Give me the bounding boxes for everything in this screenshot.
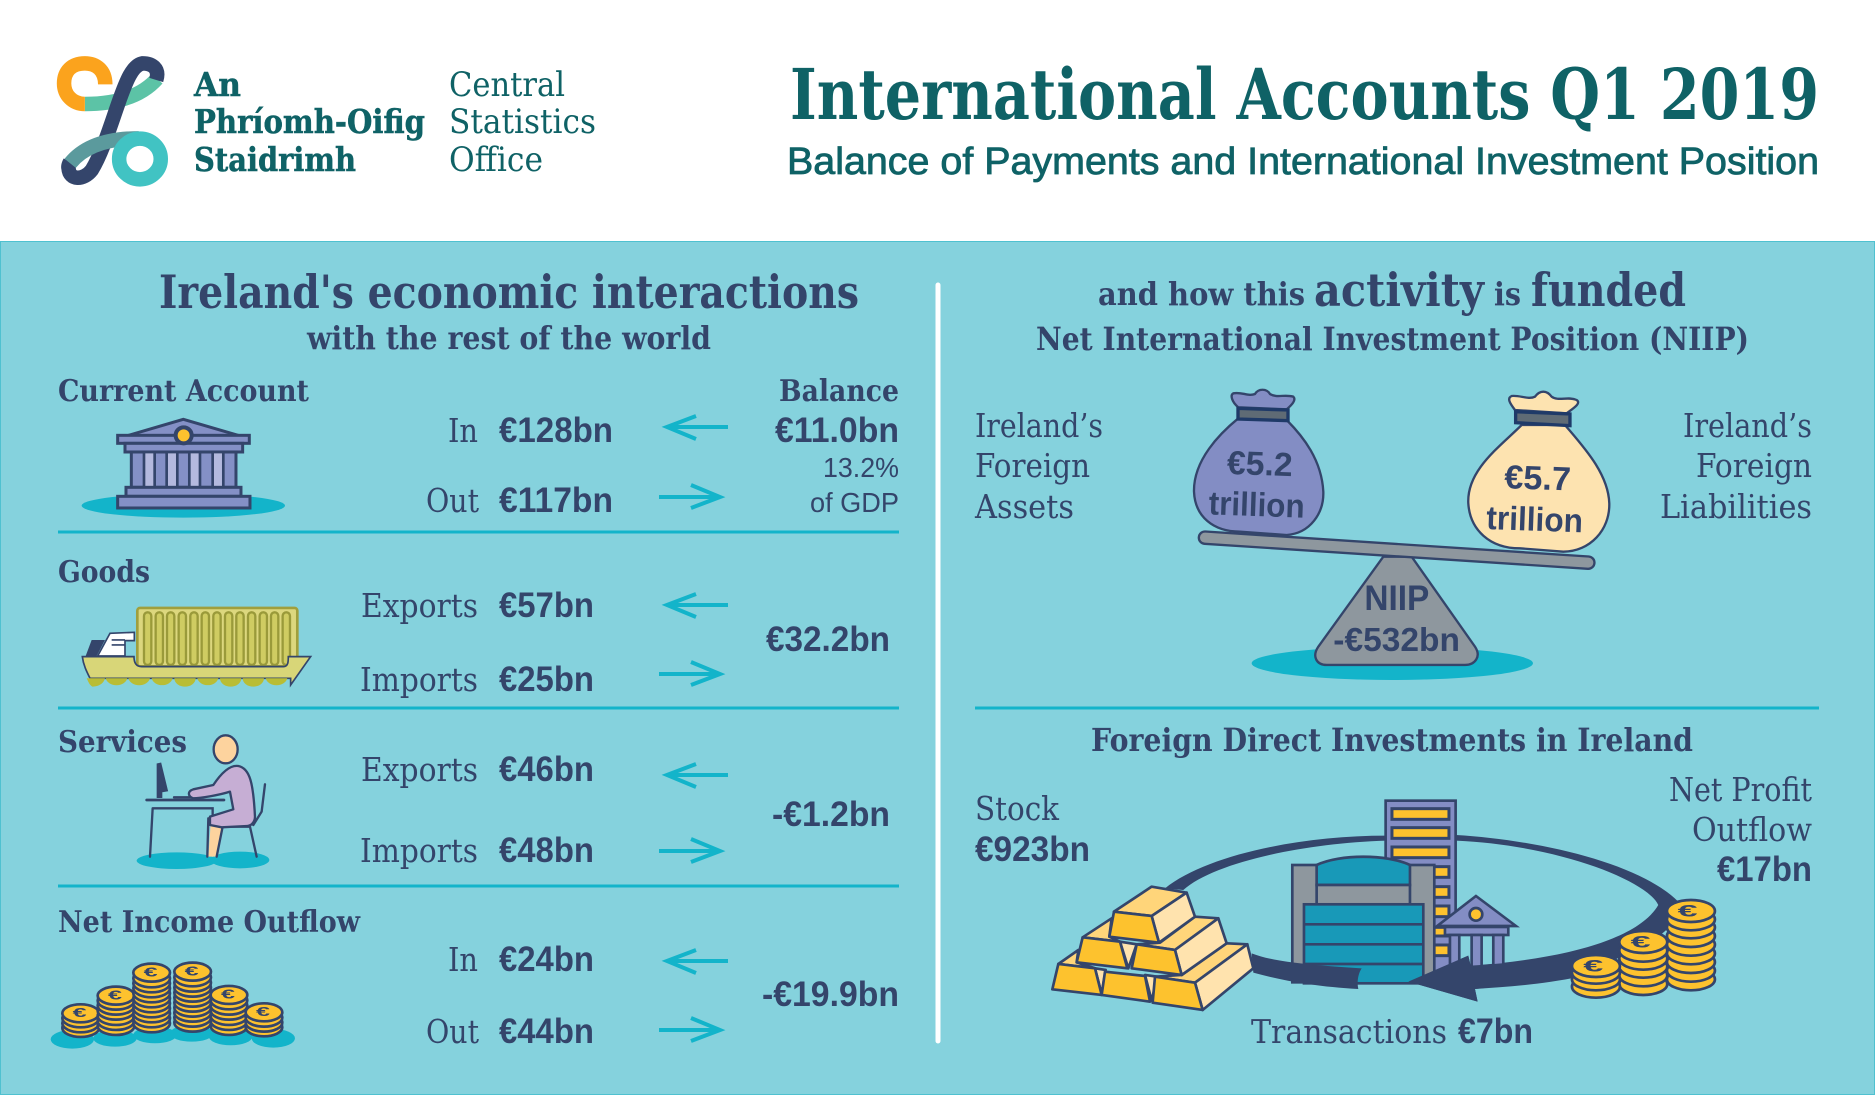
heading: Services: Services xyxy=(58,725,187,760)
left money bag: assets xyxy=(1194,390,1323,535)
icon: container ship xyxy=(82,608,311,687)
row: Imports: Imports xyxy=(360,831,478,870)
section: Current Account xyxy=(58,374,899,520)
label: Ireland's Foreign Liabilities: Ireland’s xyxy=(1683,406,1812,445)
row: In: €24bn xyxy=(499,940,594,979)
fulcrum with NIIP value xyxy=(1315,557,1478,665)
logo mark xyxy=(64,63,161,179)
label: Ireland's Foreign Liabilities: Foreign xyxy=(1696,446,1812,485)
logo text: English name: Statistics xyxy=(449,102,596,142)
coin stacks: € xyxy=(1631,933,1651,952)
icon: coin stacks: € xyxy=(221,987,236,1002)
panel: teal background xyxy=(0,242,1874,1094)
right money bag: liabilities: €5.7 xyxy=(1504,459,1572,498)
row: In: In xyxy=(448,411,478,450)
subtitle: Balance of Payments and International Investment Position xyxy=(787,141,1819,183)
label: Net Profit Outflow: Outflow xyxy=(1692,810,1812,849)
label: Ireland's Foreign Assets: Assets xyxy=(974,487,1074,526)
divider between left and right columns xyxy=(936,285,940,1041)
left column heading xyxy=(159,265,859,357)
left column heading: with the rest of the world xyxy=(306,319,711,357)
heading: Foreign Direct Investments in Ireland: Foreign Direct Investments in Ireland xyxy=(1091,721,1693,759)
left column heading: Ireland's economic interactions xyxy=(159,265,859,319)
balance value: -€19.9bn xyxy=(762,975,899,1014)
label: Ireland's Foreign Liabilities: Liabilities xyxy=(1660,487,1812,526)
cycle arrow head, lower right xyxy=(1408,955,1580,1002)
label: Ireland's Foreign Assets xyxy=(974,406,1103,526)
coin stacks: € xyxy=(1583,957,1603,976)
row: Imports xyxy=(360,660,720,699)
logo text: Irish name xyxy=(193,65,425,179)
right money bag: liabilities xyxy=(1468,392,1609,552)
logo text: Irish name: An xyxy=(193,65,241,104)
label: Stock: Stock xyxy=(975,789,1060,828)
icon: coin stacks xyxy=(51,963,295,1049)
row: Out xyxy=(426,1012,720,1051)
row: In xyxy=(448,940,728,979)
label: Stock xyxy=(975,789,1090,869)
icon: coin stacks: € xyxy=(108,987,123,1002)
label: Net Profit Outflow xyxy=(1669,770,1812,889)
left money bag: assets: €5.2 xyxy=(1226,445,1293,484)
section: Goods xyxy=(58,555,890,699)
section: Services xyxy=(58,725,890,870)
row: Imports: €48bn xyxy=(499,831,594,870)
icon: coin stacks: € xyxy=(73,1005,88,1020)
icon: coin stacks: € xyxy=(144,964,159,979)
row: In: In xyxy=(448,940,478,979)
right column heading xyxy=(1036,263,1749,358)
logo: Central Statistics Office xyxy=(64,63,596,180)
illustration: foreign direct investment cycle xyxy=(1052,801,1715,1010)
label: Ireland's Foreign Assets: Ireland’s xyxy=(975,406,1103,445)
heading: Net Income Outflow: Net Income Outflow xyxy=(58,905,361,940)
icon: bank xyxy=(82,419,285,518)
tower xyxy=(1386,801,1456,976)
logo text: English name: Office xyxy=(449,140,543,180)
section: Net Income Outflow xyxy=(51,905,899,1051)
row: Out xyxy=(426,481,720,520)
row: Exports xyxy=(361,750,728,789)
balance value: -€1.2bn xyxy=(772,795,890,834)
label: Stock: €923bn xyxy=(975,830,1090,869)
right column heading: and how this xyxy=(1098,275,1305,313)
row: Exports: Exports xyxy=(361,750,478,789)
heading: Goods: Goods xyxy=(58,555,150,590)
label: Transactions: Transactions xyxy=(1251,1012,1447,1051)
small bank xyxy=(1437,896,1516,968)
row: Out: €117bn xyxy=(499,481,613,520)
row: Out: Out xyxy=(426,481,479,520)
label: Ireland's Foreign Liabilities xyxy=(1660,406,1812,526)
row: In xyxy=(448,411,728,450)
left money bag: assets: trillion xyxy=(1208,485,1305,526)
label: Transactions: €7bn xyxy=(1458,1012,1533,1051)
row: Out: €44bn xyxy=(499,1012,594,1051)
icon: coin stacks: € xyxy=(256,1004,271,1019)
beam xyxy=(1205,538,1588,563)
row: Exports: €46bn xyxy=(499,750,594,789)
logo text: English name: Central xyxy=(449,65,565,105)
label: Net Profit Outflow: €17bn xyxy=(1717,850,1812,889)
logo text: English name xyxy=(449,65,596,180)
chart: NIIP balance scale with money bags xyxy=(1194,390,1609,680)
gold bars xyxy=(1052,887,1253,1010)
balance value: 13.2% xyxy=(823,452,899,483)
label: Ireland's Foreign Assets: Foreign xyxy=(975,446,1090,485)
heading: Balance: Balance xyxy=(779,374,899,409)
fulcrum with NIIP value: NIIP xyxy=(1364,579,1429,618)
balance value: €32.2bn xyxy=(766,620,890,659)
row: Out: Out xyxy=(426,1012,479,1051)
row: Imports: Imports xyxy=(360,660,478,699)
right column heading: activity xyxy=(1314,263,1485,317)
fulcrum with NIIP value: -€532bn xyxy=(1333,622,1460,659)
coin stacks xyxy=(1572,900,1715,998)
coin stacks: € xyxy=(1678,902,1698,921)
heading: Current Account: Current Account xyxy=(58,374,309,409)
office building xyxy=(1292,857,1434,983)
balance value xyxy=(775,411,899,518)
right money bag: liabilities: trillion xyxy=(1486,500,1584,540)
icon: coin stacks: € xyxy=(185,963,200,978)
row: Imports xyxy=(360,831,720,870)
balance value: of GDP xyxy=(810,487,899,518)
row: Exports: €57bn xyxy=(499,586,594,625)
right column heading: is xyxy=(1494,275,1521,313)
cycle arrow lower left xyxy=(1252,953,1362,989)
logo text: Irish name: Staidrimh xyxy=(194,140,356,179)
row: Imports: €25bn xyxy=(499,660,594,699)
right column heading: funded xyxy=(1531,263,1686,317)
label: Net Profit Outflow: Net Profit xyxy=(1669,770,1812,809)
icon: person at desk xyxy=(137,735,269,869)
right column heading: Net International Investment Position (NIIP) xyxy=(1036,320,1749,358)
row: In: €128bn xyxy=(499,411,613,450)
row: Exports xyxy=(361,586,728,625)
cycle arrow upper xyxy=(1165,835,1685,1002)
balance value: €11.0bn xyxy=(775,411,899,450)
row: Exports: Exports xyxy=(361,586,478,625)
logo text: Irish name: Phríomh-Oifig xyxy=(194,102,425,141)
